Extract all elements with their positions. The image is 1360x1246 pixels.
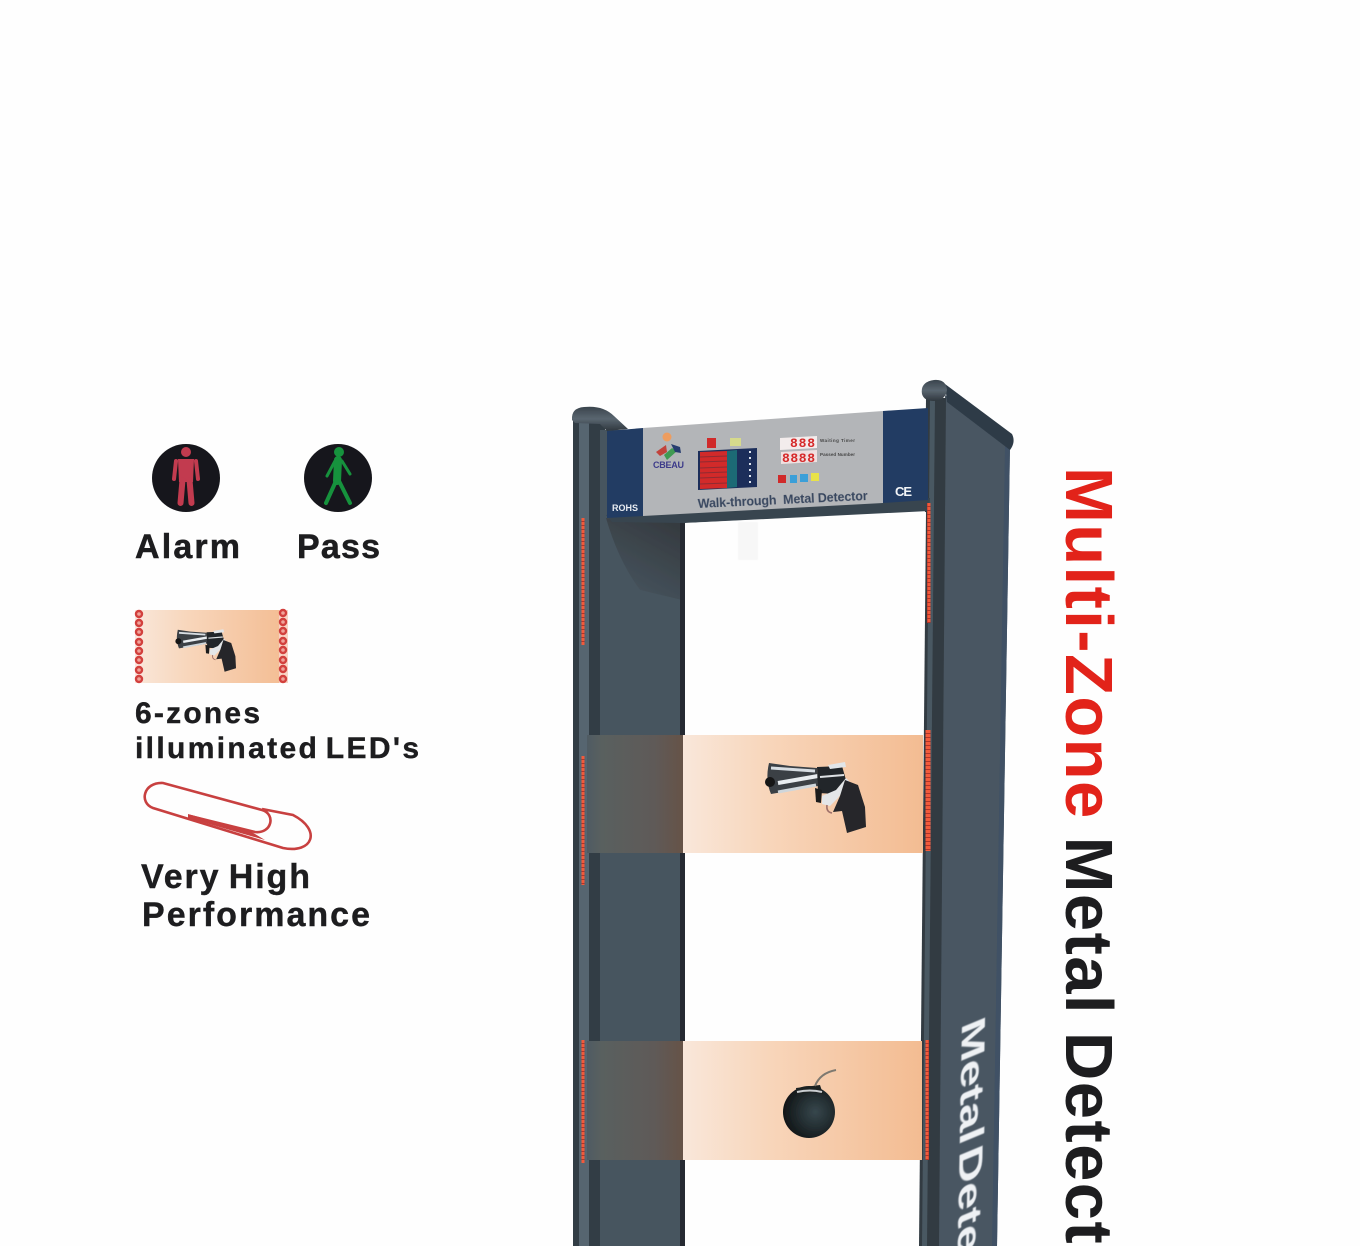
zone band: lower xyxy=(587,1041,922,1160)
icon: alarm pedestrian signal xyxy=(152,444,220,512)
counter displays: Passed Number xyxy=(820,452,855,457)
label: very high performance: Very High xyxy=(141,858,310,896)
label: pass: Pass xyxy=(297,528,380,566)
opening xyxy=(685,512,926,1246)
panel: left blue plate xyxy=(607,428,643,518)
walk-through metal detector gate xyxy=(572,380,1014,1246)
right side panel xyxy=(918,395,1010,1246)
panel: grey control face xyxy=(643,411,883,516)
label: 6-zones illuminated LEDs: 6-zones xyxy=(135,697,260,730)
label: alarm: Alarm xyxy=(135,528,240,566)
counter displays xyxy=(780,436,855,466)
label: 6-zones illuminated LEDs xyxy=(135,697,419,765)
left post xyxy=(573,420,685,1246)
left post cap xyxy=(572,407,628,431)
icon: bomb xyxy=(783,1070,836,1138)
label: 6-zones illuminated LEDs: illuminated LED's xyxy=(135,732,419,765)
label: ROHS: ROHS xyxy=(612,503,638,513)
right post cap xyxy=(922,380,1014,450)
zone display xyxy=(698,448,757,490)
status lights xyxy=(778,473,819,483)
panel shadow strip xyxy=(606,498,930,523)
icon: logo xyxy=(653,432,684,470)
label: CE: CE xyxy=(895,484,912,499)
icon: zone illumination sample xyxy=(135,610,288,683)
LED strips: right xyxy=(926,503,930,1160)
icon: logo: CBEAU xyxy=(653,460,684,470)
counter displays: Waiting Timer xyxy=(820,438,855,443)
zone band: upper xyxy=(587,735,923,853)
icon: revolver xyxy=(765,762,866,833)
icon: pass pedestrian signal xyxy=(304,444,372,512)
indicator lights xyxy=(707,438,741,448)
panel title: Walk-through Metal Detector xyxy=(697,489,868,511)
LED strips: left xyxy=(582,518,584,1163)
icon: paperclip xyxy=(145,783,311,849)
label: very high performance: Performance xyxy=(142,896,370,934)
panel: right blue plate xyxy=(883,408,928,503)
label: very high performance xyxy=(141,858,370,934)
counter displays: 888 xyxy=(790,436,815,451)
counter displays: 8888 xyxy=(782,451,815,466)
